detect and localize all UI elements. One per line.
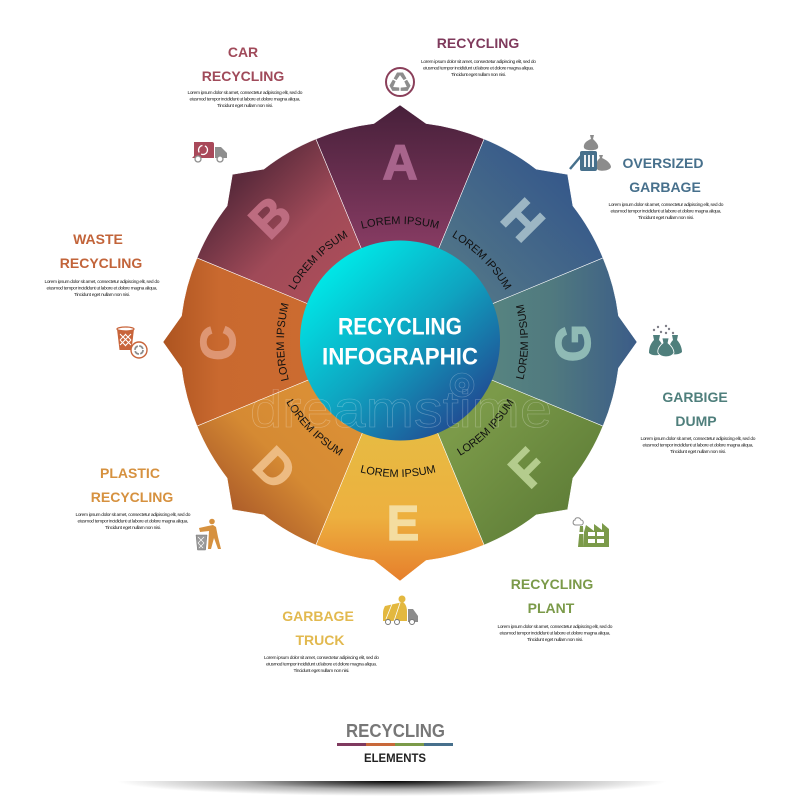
text E: eiusmod tempor incididunt ut labore et dolore magna aliqua. [266,662,377,668]
icon: oversized garbage [570,135,611,171]
text F [498,624,613,643]
heading E: GARBAGE [282,608,354,624]
letter B: B [239,186,302,249]
icon: waste bin with recycle symbol [117,327,147,358]
heading B: CAR [228,44,258,60]
panel: sector wheel [163,105,637,581]
block B: car recycling [188,44,303,109]
text A: Tincidunt eget nullam non nisi. [451,72,506,78]
ground shadow [117,781,667,796]
block D: plastic recycling: RECYCLING [91,489,173,505]
text D: Lorem ipsum dolor sit amet, consectetur adipiscing elit, sed do [76,512,191,518]
footer title [337,720,453,765]
sector F [341,283,627,569]
block G: garbige dump: DUMP [675,413,717,429]
text B: eiusmod tempor incididunt ut labore et dolore magna aliqua. [190,96,300,102]
sector D [173,283,459,569]
text D: eiusmod tempor incididunt ut labore et dolore magna aliqua. [78,518,188,524]
text H: eiusmod tempor incididunt ut labore et dolore magna aliqua. [610,208,722,214]
center title: INFOGRAPHIC [322,344,478,370]
heading A: RECYCLING [437,35,519,51]
label B: LOREM IPSUM [288,230,348,290]
sector A [316,105,484,342]
text E [264,655,379,674]
sector E [316,342,484,581]
letter F: F [499,439,558,498]
heading G: GARBIGE [662,389,728,405]
heading C: WASTE [73,231,123,247]
footer subheading: ELEMENTS [364,751,426,765]
text F: eiusmod tempor incididunt ut labore et dolore magna aliqua. [500,630,610,636]
block C: waste recycling: RECYCLING [60,255,142,271]
text F: Lorem ipsum dolor sit amet, consectetur adipiscing elit, sed do [498,624,613,630]
block H: oversized garbage [608,155,724,221]
curved sector labels [276,216,528,478]
block B: car recycling: RECYCLING [202,68,284,84]
icon: recycle symbol [386,68,414,96]
label G: LOREM IPSUM [516,304,528,380]
text G: eiusmod tempor incididunt ut labore et dolore magna aliqua. [642,442,754,448]
letter D: D [243,437,306,500]
icon: person using bin [196,519,221,550]
text F: Tincidunt eget nullam non nisi. [527,637,583,643]
text C: eiusmod tempor incididunt ut labore et dolore magna aliqua. [46,286,158,292]
block F: recycling plant: PLANT [528,600,575,616]
text B: Tincidunt eget nullam non nisi. [217,103,273,109]
text H: Lorem ipsum dolor sit amet, consectetur adipiscing elit, sed do [608,202,724,208]
text E: Lorem ipsum dolor sit amet, consectetur adipiscing elit, sed do [264,655,379,661]
heading D: PLASTIC [100,465,160,481]
label H: LOREM IPSUM [452,230,512,290]
icon: recycling truck [192,142,227,162]
text A [421,59,536,78]
sector C [163,258,400,426]
sector G [400,258,637,426]
block G: garbige dump [640,389,756,455]
center circle [300,240,500,440]
text C: Tincidunt eget nullam non nisi. [74,292,130,298]
text C: Lorem ipsum dolor sit amet, consectetur adipiscing elit, sed do [44,279,160,285]
text C [44,279,160,298]
icon: garbage truck [383,596,418,624]
label D: LOREM IPSUM [286,398,344,456]
text G [640,436,756,455]
letter H: H [491,189,554,252]
heading F: RECYCLING [511,576,593,592]
letter G: G [547,324,601,362]
center title: RECYCLING [338,314,462,340]
block H: oversized garbage: GARBAGE [629,179,701,195]
text H [608,202,724,221]
text A: Lorem ipsum dolor sit amet, consectetur adipiscing elit, sed do [421,59,536,65]
letter C: C [192,325,246,361]
text H: Tincidunt eget nullam non nisi. [638,215,694,221]
label A: LOREM IPSUM [361,216,439,229]
label E: LOREM IPSUM [360,465,436,478]
letter A: A [382,136,418,190]
text E: Tincidunt eget nullam non nisi. [294,668,350,674]
sector H [341,115,627,401]
text B [188,90,303,109]
footer color bar [337,743,453,746]
block D: plastic recycling [76,465,191,531]
sector B [173,115,459,401]
block A: recycling [421,35,536,78]
label C: LOREM IPSUM [276,303,289,381]
footer heading: RECYCLING [346,720,445,741]
center title [322,314,478,370]
heading H: OVERSIZED [623,155,703,171]
text A: eiusmod tempor incididunt ut labore et dolore magna aliqua. [423,66,534,72]
icon: factory [573,518,609,547]
text B: Lorem ipsum dolor sit amet, consectetur adipiscing elit, sed do [188,90,303,96]
text G: Tincidunt eget nullam non nisi. [670,449,726,455]
block E: garbage truck [264,608,379,674]
label F: LOREM IPSUM [456,399,514,456]
text D: Tincidunt eget nullam non nisi. [105,525,161,531]
icon: garbage dump [649,325,682,357]
block F: recycling plant [498,576,613,643]
letter E: E [387,497,419,551]
block C: waste recycling [44,231,160,298]
sector letters [192,136,601,551]
text G: Lorem ipsum dolor sit amet, consectetur adipiscing elit, sed do [640,436,756,442]
watermark: dreamstime [250,381,552,439]
block E: garbage truck: TRUCK [296,632,344,648]
text D [76,512,191,531]
